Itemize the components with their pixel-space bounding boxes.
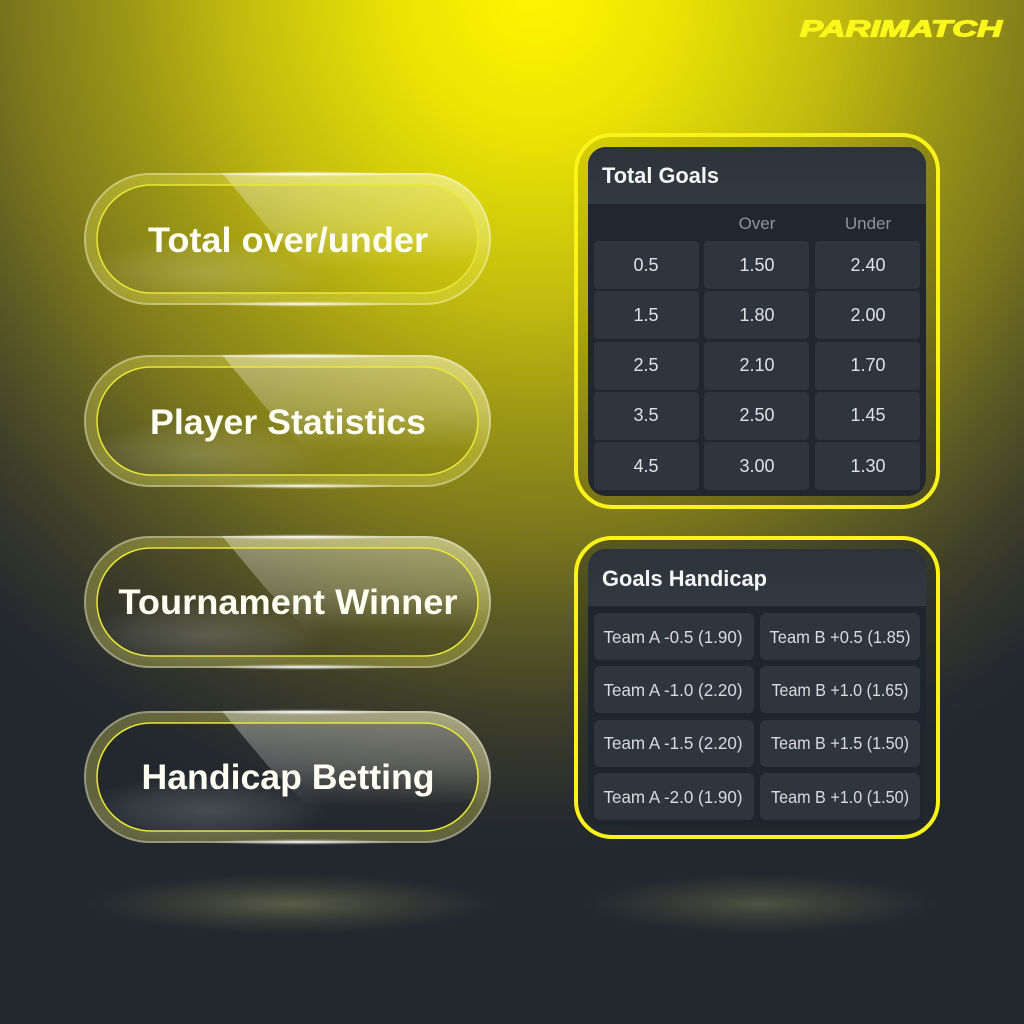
odds values: 0.5	[633, 255, 659, 275]
pill: Handicap Betting	[80, 709, 491, 845]
column headers	[739, 214, 891, 233]
panel: Goals Handicap	[576, 538, 938, 837]
odds values: 1.70	[850, 355, 886, 375]
panel header	[588, 549, 926, 606]
odds values: 2.5	[633, 355, 659, 375]
heading: Goals Handicap	[602, 566, 767, 591]
odds values: 3.5	[633, 405, 659, 425]
handicap values: Team B +1.0 (1.65)	[772, 680, 908, 700]
pill: Player Statistics	[80, 353, 491, 489]
odds values: 1.80	[739, 305, 775, 325]
handicap values: Team A -2.0 (1.90)	[604, 787, 742, 807]
panel header	[588, 147, 926, 204]
label: Total over/under	[148, 221, 428, 260]
logo: Parimatch: PARIMATCH	[800, 16, 1003, 42]
column headers: Under	[845, 214, 891, 233]
glow: floor reflection right	[580, 874, 940, 934]
odds values: 1.5	[633, 305, 659, 325]
label: Player Statistics	[150, 403, 426, 442]
odds values: 2.50	[739, 405, 775, 425]
heading: Total Goals	[602, 163, 719, 188]
handicap values: Team B +0.5 (1.85)	[770, 627, 910, 647]
handicap values: Team A -1.5 (2.20)	[604, 733, 742, 753]
panel: Total Goals	[576, 135, 938, 507]
odds values: 2.00	[850, 305, 886, 325]
odds values: 1.30	[850, 456, 886, 476]
odds values: 1.50	[739, 255, 775, 275]
handicap values: Team B +1.5 (1.50)	[771, 733, 909, 753]
handicap values	[604, 627, 910, 807]
glow: floor reflection left	[85, 874, 495, 934]
label: Handicap Betting	[142, 758, 434, 797]
column headers: Over	[739, 214, 776, 233]
handicap values: Team A -0.5 (1.90)	[604, 627, 742, 647]
odds values: 2.40	[850, 255, 886, 275]
odds table	[594, 241, 920, 490]
handicap cells	[594, 613, 920, 820]
odds values	[633, 255, 886, 476]
pill: Tournament Winner	[80, 534, 491, 670]
label: Tournament Winner	[118, 583, 458, 622]
odds values: 4.5	[633, 456, 659, 476]
odds values: 1.45	[850, 405, 886, 425]
pill: Total over/under	[80, 171, 491, 307]
handicap values: Team B +1.0 (1.50)	[771, 787, 909, 807]
odds values: 2.10	[739, 355, 775, 375]
handicap values: Team A -1.0 (2.20)	[604, 680, 742, 700]
odds values: 3.00	[739, 456, 775, 476]
